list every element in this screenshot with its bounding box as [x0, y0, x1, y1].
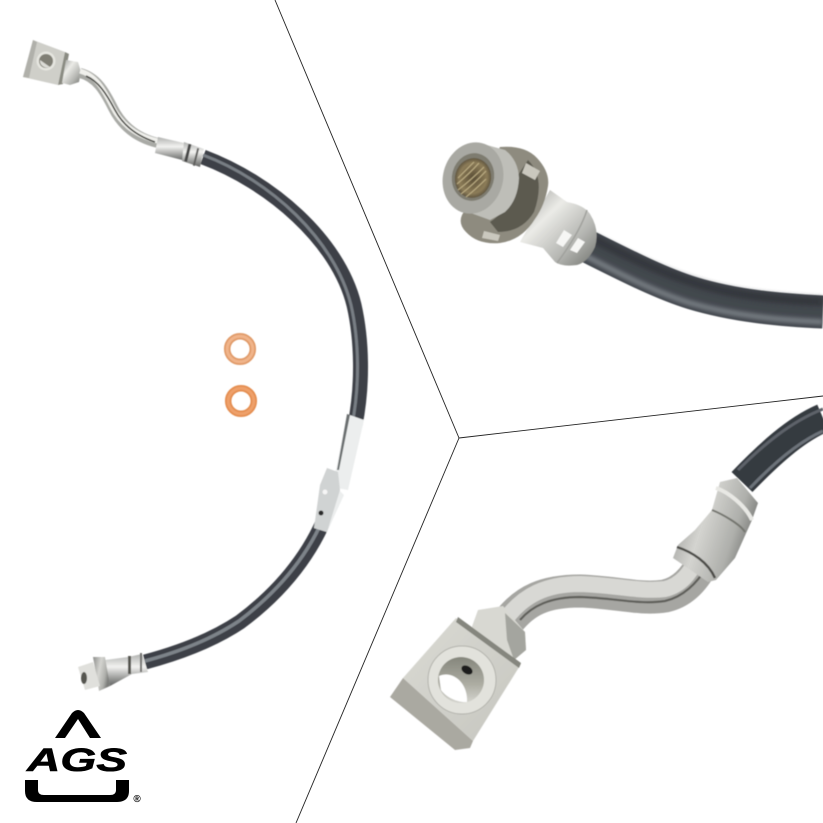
mounting clip — [314, 414, 364, 532]
divider lines — [275, 0, 823, 823]
copper washer 1 — [227, 336, 253, 362]
AGS logo — [25, 710, 141, 805]
crimp ferrule — [673, 478, 758, 582]
top steel tube — [80, 71, 158, 143]
rubber hose lower section — [145, 495, 333, 662]
bent steel tube — [508, 560, 706, 622]
registered mark: ® — [133, 794, 141, 805]
logo top arch — [55, 710, 101, 738]
hex collar — [470, 606, 526, 662]
close-up: banjo fitting and tube — [390, 409, 823, 750]
flange — [461, 147, 548, 243]
crimp collar — [520, 190, 597, 266]
rubber hose upper section — [203, 155, 361, 425]
full brake hose assembly — [23, 40, 364, 691]
logo bottom bracket — [25, 780, 129, 802]
top crimp ferrule — [155, 137, 204, 167]
logo wordmark: AGS — [26, 742, 128, 778]
threaded port — [435, 135, 519, 221]
hose close-up — [582, 238, 823, 322]
copper washer 2 — [228, 388, 254, 414]
square banjo block — [390, 617, 521, 750]
close-up: threaded end fitting — [435, 135, 823, 322]
top banjo block — [23, 40, 81, 85]
hose close-up — [738, 409, 823, 488]
bottom fitting — [78, 653, 148, 691]
